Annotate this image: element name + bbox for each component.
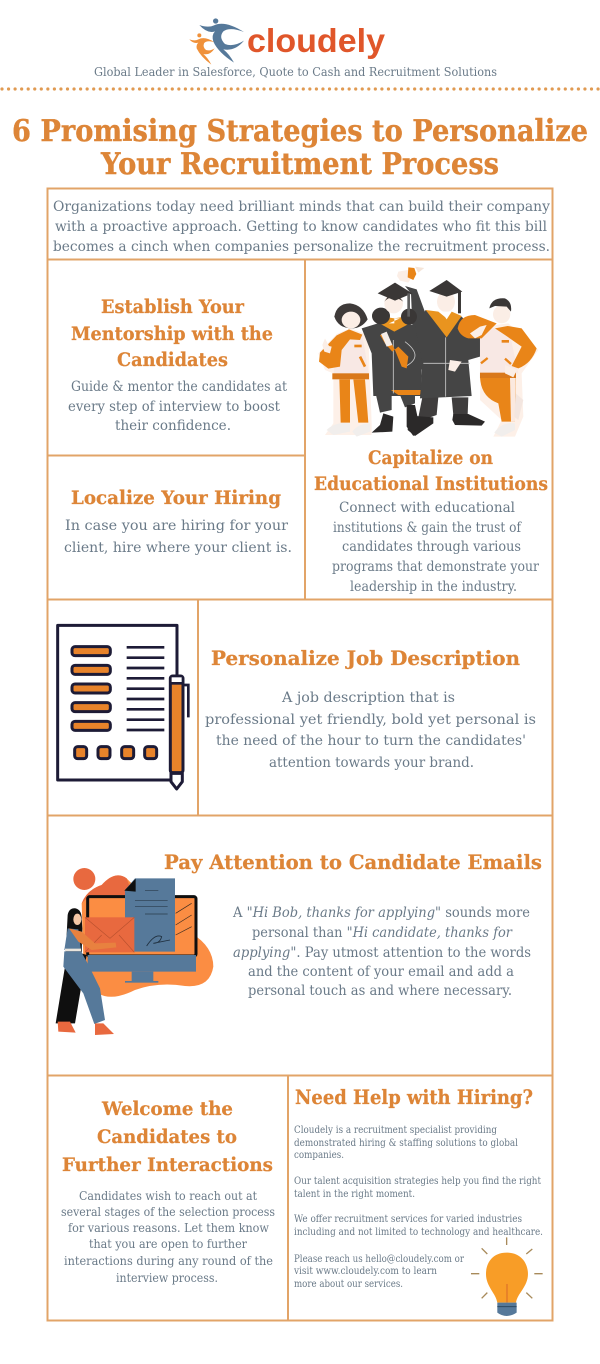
body: interactions during any round of the xyxy=(64,1253,273,1268)
heading xyxy=(62,1098,273,1176)
heading: Localize Your Hiring xyxy=(71,487,281,509)
body: leadership in the industry. xyxy=(350,579,517,595)
body: programs that demonstrate your xyxy=(332,559,539,575)
icon: light bulb xyxy=(471,1237,543,1316)
panel: candidate emails body: applying". Pay utmost attention to the words xyxy=(233,945,531,961)
body: Cloudely is a recruitment specialist providing xyxy=(294,1124,497,1136)
body: interview process. xyxy=(116,1270,218,1285)
body: for various reasons. Let them know xyxy=(68,1220,269,1235)
body: including and not limited to technology and healthcare. xyxy=(294,1226,543,1238)
title xyxy=(12,114,588,182)
panel: need help with hiring xyxy=(293,1085,543,1290)
panel: candidate emails heading: Pay Attention to Candidate Emails xyxy=(164,850,542,874)
panel: candidate emails body: A "Hi Bob, thanks for applying" sounds more xyxy=(232,905,530,921)
heading: Candidates xyxy=(117,349,228,371)
panel: candidate emails body xyxy=(232,905,531,999)
right student xyxy=(458,298,538,437)
body: client, hire where your client is. xyxy=(64,540,292,556)
body: In case you are hiring for your xyxy=(65,518,289,534)
panel: mentorship xyxy=(68,296,288,434)
intro text: becomes a cinch when companies personalize the recruitment process. xyxy=(53,239,550,255)
intro text: Organizations today need brilliant minds that can build their company xyxy=(53,199,550,215)
tagline: Global Leader in Salesforce, Quote to Cash and Recruitment Solutions xyxy=(94,64,497,79)
icon: cloudely figures xyxy=(189,18,244,65)
left student xyxy=(318,303,372,437)
body xyxy=(332,500,539,595)
panel: candidate emails body: and the content of your email and add a xyxy=(248,964,514,980)
body xyxy=(205,690,536,771)
panel: localize xyxy=(64,487,292,556)
heading xyxy=(71,296,273,371)
body: Connect with educational xyxy=(339,500,515,516)
body xyxy=(293,1124,543,1290)
body xyxy=(61,1188,275,1285)
graduate man xyxy=(408,280,485,436)
panel grid xyxy=(47,188,552,1321)
body: professional yet friendly, bold yet personal is xyxy=(205,712,536,728)
body: We offer recruitment services for varied industries xyxy=(294,1213,522,1225)
heading: Welcome the xyxy=(101,1098,233,1120)
body: Candidates wish to reach out at xyxy=(79,1188,257,1203)
body: the need of the hour to turn the candidates' xyxy=(216,733,526,749)
icon: document and pen xyxy=(58,625,188,789)
icon: graduates and students xyxy=(318,267,538,437)
body: candidates through various xyxy=(342,539,521,555)
body xyxy=(64,518,292,556)
heading: Educational Institutions xyxy=(314,473,548,495)
heading: Need Help with Hiring? xyxy=(295,1085,533,1109)
body: institutions & gain the trust of xyxy=(333,520,522,536)
body: attention towards your brand. xyxy=(269,755,474,771)
heading: Mentorship with the xyxy=(71,323,273,345)
body: visit www.cloudely.com to learn xyxy=(293,1265,437,1277)
panel: further interactions xyxy=(61,1098,275,1285)
icon: person with envelope and monitor xyxy=(56,868,213,1035)
body: several stages of the selection process xyxy=(61,1204,275,1219)
heading: Further Interactions xyxy=(62,1154,273,1176)
body: their confidence. xyxy=(115,418,231,434)
panel: job description xyxy=(205,646,536,771)
body: that you are open to further xyxy=(89,1236,247,1251)
heading: Candidates to xyxy=(97,1126,237,1148)
body xyxy=(68,379,288,434)
body: A job description that is xyxy=(281,690,455,706)
wordmark: cloudely xyxy=(247,22,386,59)
title: Your Recruitment Process xyxy=(100,147,499,182)
body: every step of interview to boost xyxy=(68,399,281,415)
heading: Capitalize on xyxy=(368,447,493,469)
body: more about our services. xyxy=(294,1278,403,1290)
panel: educational institutions xyxy=(314,447,548,595)
body: Guide & mentor the candidates at xyxy=(71,379,288,395)
intro text: with a proactive approach. Getting to know candidates who fit this bill xyxy=(55,219,548,235)
body: demonstrated hiring & staffing solutions to global xyxy=(294,1137,519,1149)
body: companies. xyxy=(294,1149,344,1161)
body: talent in the right moment. xyxy=(294,1188,415,1200)
panel: candidate emails body: personal touch as and where necessary. xyxy=(248,983,512,999)
heading: Establish Your xyxy=(101,296,245,318)
logo xyxy=(189,18,386,65)
heading xyxy=(314,447,548,495)
panel: candidate emails body: personal than "Hi candidate, thanks for xyxy=(252,925,513,941)
body: Please reach us hello@cloudely.com or xyxy=(294,1253,465,1265)
body: Our talent acquisition strategies help you find the right xyxy=(294,1175,542,1187)
intro text xyxy=(53,199,550,255)
graduate woman xyxy=(362,267,429,436)
heading: Personalize Job Description xyxy=(211,646,520,670)
